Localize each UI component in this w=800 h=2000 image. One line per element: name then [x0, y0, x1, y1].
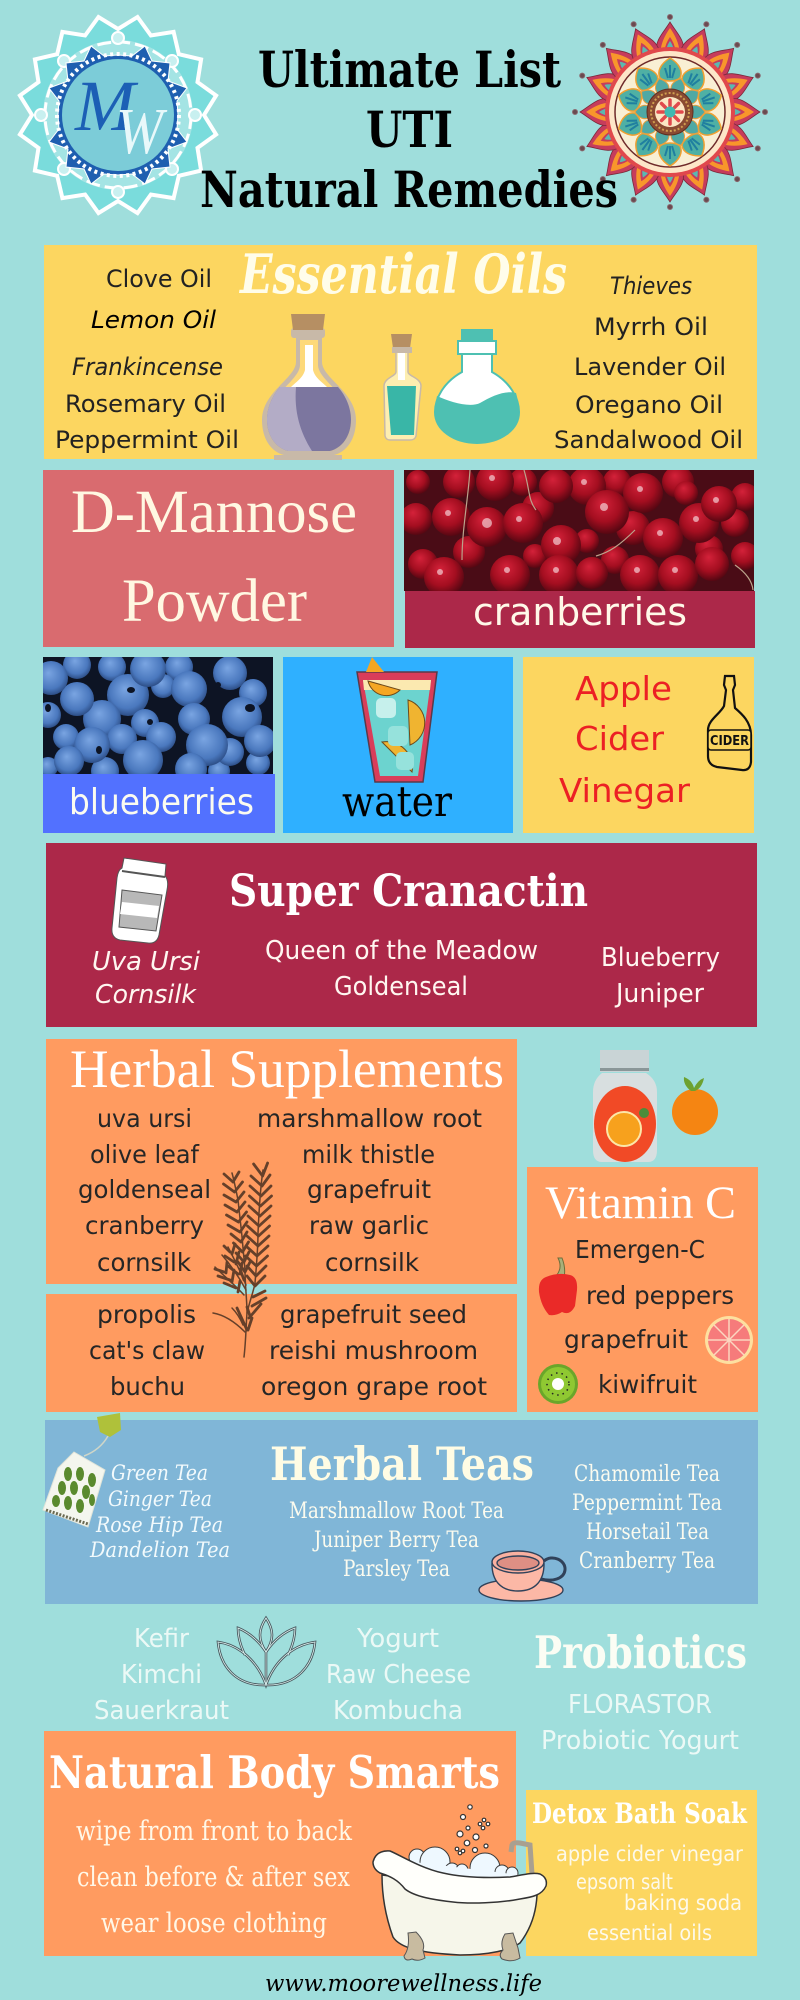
decorative mandala [572, 14, 768, 210]
herbal list: cornsilk [325, 1248, 420, 1277]
herbal list: buchu [110, 1372, 185, 1401]
oils list left: Peppermint Oil [55, 426, 239, 454]
panel: blueberries [34, 651, 276, 833]
icon: large purple oil bottle [262, 314, 356, 460]
panel: water: water [342, 777, 453, 826]
icon: tea bag [43, 1413, 121, 1527]
oils list left: Frankincense [72, 353, 223, 381]
panel: cranberries: cranberries [473, 590, 687, 634]
tea list left: Green Tea [111, 1461, 208, 1485]
tea list middle [289, 1499, 504, 1582]
icon: round teal flask [435, 329, 519, 443]
oils list right: Lavender Oil [574, 353, 726, 381]
panel: d-mannose powder: Powder [122, 568, 307, 635]
icon: rosemary sprig [213, 1163, 272, 1357]
herbal list: cranberry [85, 1211, 204, 1240]
title [200, 40, 618, 219]
panel: natural body smarts [44, 1731, 516, 1956]
herbal list: grapefruit [307, 1175, 431, 1204]
probiotic foods list: Kimchi [121, 1660, 202, 1690]
icon: orange [672, 1077, 718, 1135]
cranactin ingredients: Queen of the Meadow [265, 936, 538, 966]
herbal list: reishi mushroom [269, 1336, 478, 1365]
probiotic foods list [94, 1624, 471, 1726]
probiotic products [541, 1690, 739, 1756]
panel: apple cider vinegar: Cider [575, 719, 664, 758]
herbal list: cornsilk [97, 1248, 192, 1277]
probiotic products: Probiotic Yogurt [541, 1726, 739, 1756]
icon: red pepper [539, 1258, 577, 1315]
tea list middle: Juniper Berry Tea [312, 1528, 479, 1553]
oils list right: Myrrh Oil [594, 313, 708, 341]
tub feet [404, 1932, 425, 1960]
detox ingredients: apple cider vinegar [556, 1842, 743, 1866]
herbal list: milk thistle [302, 1140, 435, 1169]
herbal list: propolis [97, 1300, 196, 1329]
panel: d-mannose powder: D-Mannose [71, 479, 357, 546]
detox ingredients: epsom salt [576, 1870, 673, 1894]
herbal list: cat's claw [89, 1336, 205, 1365]
panel: apple cider vinegar: Vinegar [559, 771, 690, 810]
tea list right: Chamomile Tea [574, 1462, 720, 1487]
icon: glass of water with orange [357, 657, 437, 782]
probiotic foods list: Yogurt [356, 1624, 439, 1654]
panel: herbal teas: Herbal Teas [270, 1437, 534, 1491]
panel: detox bath soak: Detox Bath Soak [532, 1797, 747, 1830]
tea list right: Cranberry Tea [579, 1549, 715, 1574]
cranactin ingredients: Goldenseal [334, 972, 468, 1002]
oils list right [554, 272, 743, 454]
panel: super cranactin: Super Cranactin [229, 866, 588, 917]
bubbles [455, 1805, 490, 1855]
vitamin c list: red peppers [586, 1281, 734, 1310]
herbal list: oregon grape root [261, 1372, 487, 1401]
foam [398, 1847, 520, 1885]
tea list middle: Parsley Tea [343, 1557, 450, 1582]
probiotic foods list: Sauerkraut [94, 1696, 229, 1726]
detox ingredients: baking soda [624, 1891, 742, 1915]
icon: cider bottle: CIDER [710, 734, 749, 749]
detox ingredients [556, 1842, 743, 1945]
panel: herbal teas [43, 1413, 758, 1604]
body smarts tips [76, 1816, 353, 1939]
faucet [511, 1843, 532, 1874]
tea list left: Dandelion Tea [89, 1538, 230, 1562]
probiotic foods list: Kefir [134, 1624, 189, 1654]
panel: essential oils [44, 242, 757, 460]
panel: probiotics: Probiotics [534, 1626, 747, 1679]
cranactin ingredients: Cornsilk [95, 980, 197, 1010]
panel: herbal supplements [46, 1039, 517, 1412]
tea list left: Ginger Tea [108, 1487, 212, 1511]
heading: essential oils: Essential Oils [238, 242, 567, 306]
vitamin c list: Emergen-C [575, 1235, 705, 1264]
probiotic foods list: Kombucha [333, 1696, 463, 1726]
panel: vitamin c: Vitamin C [545, 1177, 736, 1229]
herbal list [78, 1104, 487, 1401]
tea list right [572, 1462, 722, 1574]
tea list right: Peppermint Tea [572, 1491, 722, 1516]
vitamin c list: kiwifruit [598, 1370, 697, 1399]
icon: bathtub [373, 1805, 546, 1961]
logo letter W: W [116, 95, 167, 168]
panel: natural body smarts: Natural Body Smarts [49, 1746, 500, 1799]
probiotic products: FLORASTOR [568, 1690, 712, 1720]
icon: vitamin c bottle [593, 1050, 657, 1162]
panel: apple cider vinegar: Apple [575, 669, 672, 708]
icon: grapefruit slice [705, 1316, 753, 1364]
icon: cider bottle [708, 676, 751, 770]
herbal list: raw garlic [309, 1211, 429, 1240]
logo letter M: M [74, 66, 139, 146]
title: UTI [366, 100, 453, 159]
panel: herbal supplements: Herbal Supplements [70, 1039, 504, 1099]
icon: kiwi [538, 1364, 578, 1404]
oils list right: Thieves [610, 272, 692, 300]
icon: small teal vial [384, 334, 421, 440]
panel: super cranactin [46, 843, 757, 1027]
herbal list: grapefruit seed [280, 1300, 467, 1329]
icon: lotus [218, 1618, 315, 1685]
title: Natural Remedies [200, 160, 618, 219]
herbal list: marshmallow root [257, 1104, 482, 1133]
herbal list: goldenseal [78, 1175, 211, 1204]
herbal list: olive leaf [90, 1140, 200, 1169]
panel: probiotics [94, 1618, 747, 1756]
panel: water [283, 657, 513, 833]
cranactin ingredients: Blueberry [601, 943, 720, 973]
oils list left: Rosemary Oil [65, 390, 226, 418]
oils list left: Lemon Oil [91, 306, 216, 334]
icon: teacup [479, 1551, 565, 1601]
body smarts tips: wipe from front to back [76, 1816, 353, 1847]
panel: detox bath soak [526, 1790, 757, 1956]
tea list left [89, 1461, 230, 1562]
panel: cranberries [400, 463, 759, 648]
oils list right: Oregano Oil [575, 391, 723, 419]
tea list right: Horsetail Tea [586, 1520, 709, 1545]
vitamin c list: grapefruit [564, 1325, 688, 1354]
oils list left: Clove Oil [106, 265, 212, 293]
cranactin ingredients: Juniper [614, 979, 704, 1009]
logo mandala: MW [20, 17, 216, 213]
oils list left [55, 265, 239, 454]
panel: blueberries: blueberries [69, 782, 254, 823]
oils list right: Sandalwood Oil [554, 426, 743, 454]
cranactin ingredients: Uva Ursi [92, 947, 201, 977]
probiotic foods list: Raw Cheese [326, 1660, 471, 1690]
body smarts tips: wear loose clothing [101, 1908, 327, 1939]
herbal list: uva ursi [97, 1104, 192, 1133]
cranactin ingredients [92, 936, 720, 1010]
panel: vitamin c [527, 1167, 758, 1412]
detox ingredients: essential oils [587, 1921, 712, 1945]
vitamin c list [564, 1235, 734, 1399]
panel: apple cider vinegar [523, 657, 754, 833]
body smarts tips: clean before & after sex [77, 1862, 350, 1893]
icon: supplement jar [112, 858, 168, 943]
website url: www.moorewellness.life [265, 1971, 542, 1997]
image: blueberries [43, 657, 273, 774]
panel: d-mannose powder [43, 470, 394, 647]
image: cranberries [404, 470, 754, 591]
tea list left: Rose Hip Tea [95, 1513, 223, 1537]
title: Ultimate List [258, 40, 561, 99]
tea list middle: Marshmallow Root Tea [289, 1499, 504, 1524]
